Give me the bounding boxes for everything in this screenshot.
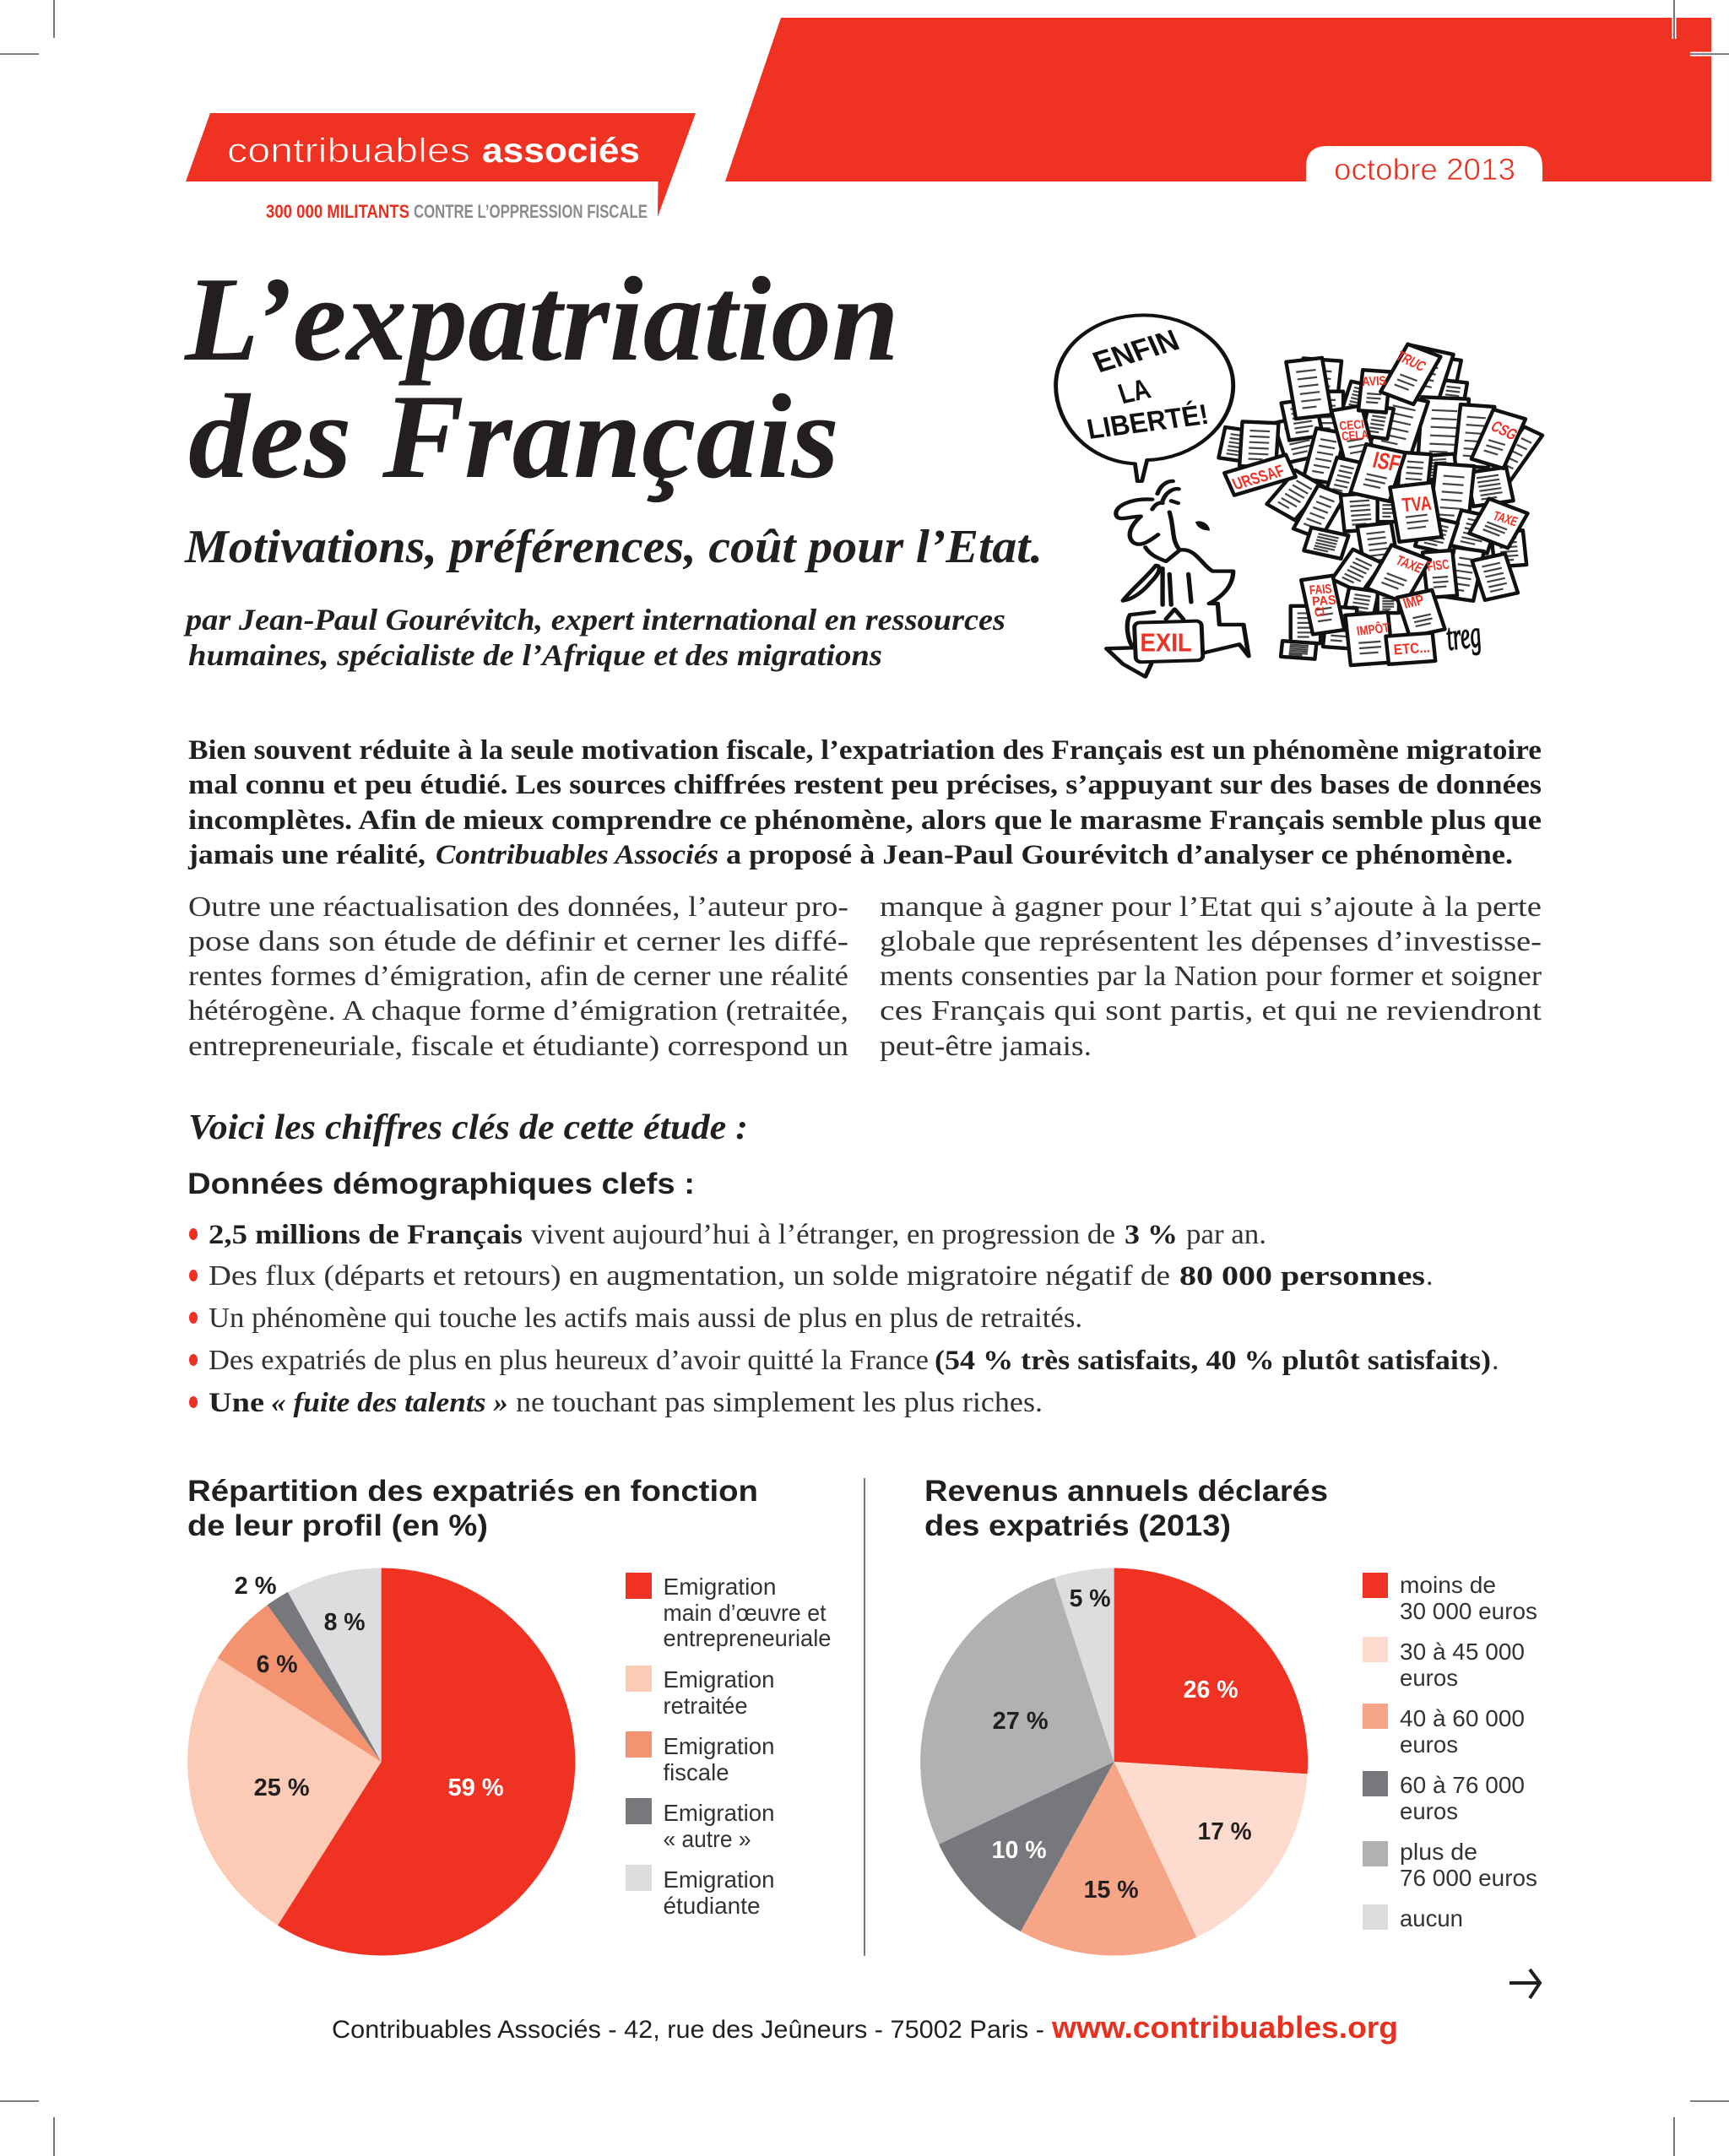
panel: profile chart [187,1475,831,1955]
intro paragraph (bold): Contribuables Associés [436,840,718,870]
logo: contribuables associés: associés [482,131,640,170]
pie chart: income: 15 % [1084,1877,1139,1904]
body text: left column: hétérogène. A chaque forme d’émigration (retraitée, [188,995,848,1027]
pile of papers: ETC... [1393,639,1431,658]
pile of papers: IMPÔT [1356,620,1390,638]
body text: left column: rentes formes d’émigration, afin de cerner une réalité [188,961,848,992]
logo: contribuables associés [186,113,696,217]
section heading: key figures: Voici les chiffres clés de cette étude : [188,1108,748,1147]
pile of papers: TRUC [1393,348,1429,374]
legend: profile [626,1573,831,1919]
illustration: expatriate leaving a pile of tax papers [1056,315,1542,677]
pile of papers: URSSAF [1229,461,1287,494]
legend: profile: main d’œuvre et [664,1600,827,1626]
legend: income: 40 à 60 000 [1400,1705,1525,1731]
pile of papers: IMP [1401,592,1426,612]
pile of papers: AVIS [1362,373,1386,389]
title: L’expatriation [183,252,899,386]
legend: profile: fiscale [664,1759,729,1785]
chart heading [187,1475,758,1542]
legend: income [1363,1572,1537,1931]
pile of papers: FISC [1426,556,1450,574]
legend: income: euros [1400,1798,1458,1824]
legend: profile: étudiante [664,1893,760,1919]
bullet 1: 3 % [1125,1220,1178,1250]
pie chart: profile: 8 % [324,1609,366,1636]
logo: contribuables associés: contribuables [227,131,470,170]
bullet 3: Un phénomène qui touche les actifs mais aussi de plus en plus de retraités. [209,1303,1082,1334]
pie chart: profile [187,1568,575,1955]
bullet list [189,1219,1499,1418]
pie chart: income: 17 % [1198,1818,1252,1845]
legend: profile: « autre » [664,1826,751,1852]
pie chart: income: 26 % [1184,1677,1238,1704]
heading: demographic data: Données démographiques clefs : [187,1167,695,1200]
chart heading: Revenus annuels déclarés [924,1475,1328,1508]
chart heading: Répartition des expatriés en fonction [187,1475,758,1508]
pile of papers [1218,344,1542,665]
intro paragraph (bold): jamais une réalité, [187,840,425,870]
arrow: next page [1509,1969,1540,1998]
bullet 1: par an. [1186,1219,1266,1250]
bullet 1 [189,1219,1266,1250]
legend: income: 30 000 euros [1400,1598,1537,1624]
date tab [1306,146,1542,187]
bullet 5: « fuite des talents » [271,1388,508,1418]
pie chart: profile: 25 % [254,1774,310,1801]
body text: left column: Outre une réactualisation des données, l’auteur pro- [188,891,848,923]
pie chart: profile: 2 % [235,1573,277,1600]
pile of papers: TAXE [1491,508,1520,529]
body text: right column: globale que représentent les dépenses d’investisse- [880,926,1542,957]
legend: income: 76 000 euros [1400,1865,1537,1891]
chart heading: des expatriés (2013) [924,1509,1231,1542]
pie chart: income: 27 % [993,1708,1049,1735]
title: des Français [188,370,839,503]
tagline: CONTRE L’OPPRESSION FISCALE [414,201,648,222]
tagline: 300 000 MILITANTS [266,201,409,222]
character with suitcase: EXIL [1141,629,1192,658]
legend: income: aucun [1400,1905,1463,1931]
pile of papers: CI [1314,604,1325,620]
intro paragraph (bold): Bien souvent réduite à la seule motivation fiscale, l’expatriation des Français est un phénomène migratoire [188,735,1542,766]
footer address [332,2010,1398,2045]
pie chart: profile: 6 % [257,1651,298,1678]
intro paragraph (bold) [187,735,1542,870]
legend: profile: Emigration [664,1800,775,1826]
legend: profile: Emigration [664,1574,777,1600]
intro paragraph (bold): incomplètes. Afin de mieux comprendre ce phénomène, alors que le marasme Français semble plus que [188,805,1542,836]
speech bubble: ENFIN [1088,324,1184,379]
chart heading: de leur profil (en %) [187,1509,488,1542]
bullet 1: vivent aujourd’hui à l’étranger, en progression de [531,1219,1115,1250]
body text: right column: ments consenties par la Nation pour former et soigner [880,961,1542,992]
speech bubble: LIBERTÉ! [1084,398,1211,445]
bullet 1: 2,5 millions de Français [209,1220,523,1250]
author line [183,603,1005,672]
pile of papers: TVA [1401,491,1433,517]
bullet 4: (54 % très satisfaits, 40 % plutôt satisfaits) [935,1346,1491,1376]
legend: profile: Emigration [664,1733,775,1759]
bullet 2: 80 000 personnes [1179,1261,1425,1292]
signature: treg [1443,612,1484,658]
author line: par Jean-Paul Gourévitch, expert international en ressources [183,603,1005,637]
legend: profile: retraitée [664,1693,748,1719]
bullet 4: Des expatriés de plus en plus heureux d’avoir quitté la France [209,1345,929,1376]
pie chart: income: 10 % [992,1837,1047,1864]
bullet 4: . [1492,1345,1499,1376]
pile of papers: TAXE [1393,553,1426,576]
panel: income chart [920,1475,1537,1956]
legend: income: euros [1400,1665,1458,1691]
speech bubble: LA [1114,372,1154,409]
author line: humaines, spécialiste de l’Afrique et des migrations [188,638,882,672]
title [183,252,899,503]
legend: income: moins de [1400,1572,1496,1598]
chart heading [924,1475,1328,1542]
footer address: Contribuables Associés - 42, rue des Jeûneurs - 75002 Paris - [332,2016,1044,2044]
bullet 5 [189,1387,1043,1418]
legend: profile: entrepreneuriale [664,1625,831,1651]
body text: right column: manque à gagner pour l’Etat qui s’ajoute à la perte [880,891,1542,923]
pie chart: income [920,1568,1308,1956]
legend: profile: Emigration [664,1866,775,1893]
intro paragraph (bold): mal connu et peu étudié. Les sources chiffrées restent peu précises, s’appuyant sur des bases de données [188,770,1542,800]
body text: right column: peut-être jamais. [880,1031,1092,1062]
bullet 4 [189,1345,1499,1376]
subtitle: Motivations, préférences, coût pour l’Etat. [184,521,1043,573]
pile of papers: FAIS [1309,581,1332,598]
pile of papers: CELA [1341,428,1369,443]
body text: right column [880,891,1542,1062]
pile of papers: CSG [1488,418,1520,443]
pie chart: income: 5 % [1070,1585,1111,1612]
body text: right column: ces Français qui sont partis, et qui ne reviendront [880,995,1542,1027]
legend: profile: Emigration [664,1666,775,1693]
bullet 2: Des flux (départs et retours) en augmentation, un solde migratoire négatif de [209,1260,1170,1292]
pile of papers: CECI [1339,418,1364,433]
bullet 5: Une [209,1388,264,1418]
body text: left column [188,891,848,1062]
pile of papers: PAS [1311,592,1336,609]
character with suitcase [1107,481,1249,677]
legend: income: euros [1400,1731,1458,1758]
date tab: octobre 2013 [1334,152,1515,187]
legend: income: 30 à 45 000 [1400,1639,1525,1665]
bullet 2: . [1426,1260,1434,1292]
legend: income: 60 à 76 000 [1400,1772,1525,1798]
body text: left column: pose dans son étude de définir et cerner les diffé- [188,926,848,957]
footer address: www.contribuables.org [1051,2010,1398,2045]
pie chart: profile: 59 % [448,1774,504,1801]
header red banner [725,18,1711,187]
speech bubble [1056,315,1233,481]
tagline [266,201,648,222]
bullet 5: ne touchant pas simplement les plus riches. [516,1387,1043,1418]
legend: income: plus de [1400,1839,1477,1865]
body text: left column: entrepreneuriale, fiscale et étudiante) correspond un [188,1031,848,1062]
pile of papers: ISF [1370,447,1403,477]
intro paragraph (bold): a proposé à Jean-Paul Gourévitch d’analyser ce phénomène. [726,840,1513,870]
